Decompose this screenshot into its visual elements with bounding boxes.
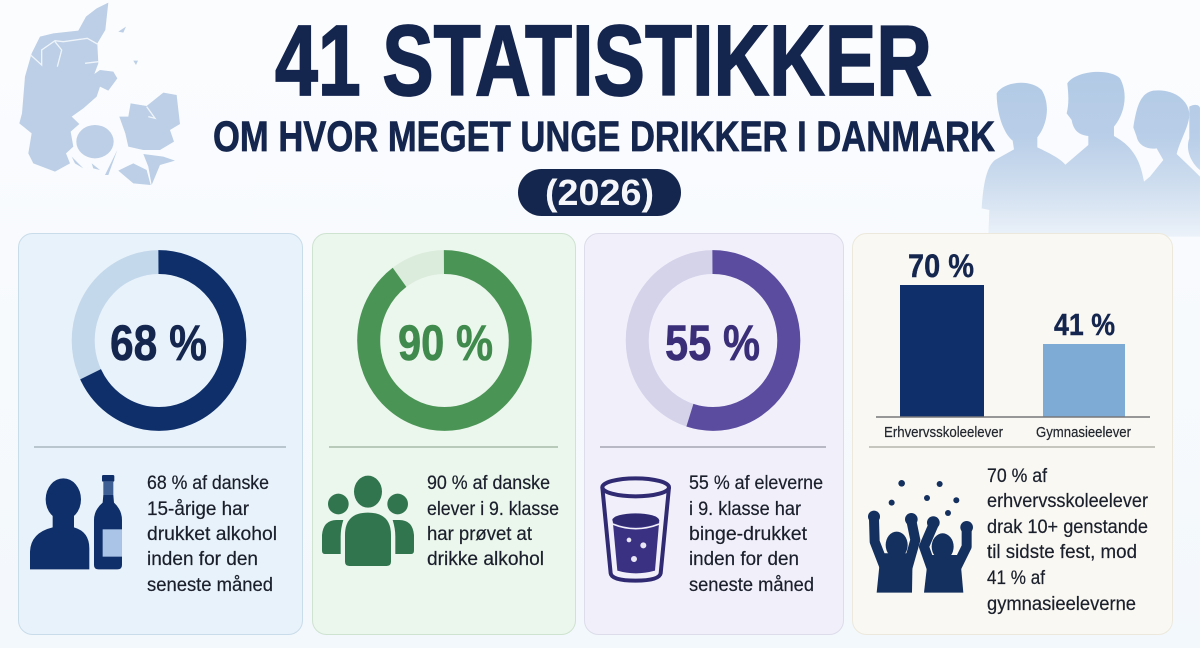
icon: cheering people — [868, 480, 973, 593]
axis label: Gymnasieelever — [1036, 424, 1131, 441]
card background — [18, 234, 302, 634]
subtitle: OM HVOR MEGET UNGE DRIKKER I DANMARK — [213, 113, 995, 161]
value 70 %: 70 % — [908, 248, 974, 284]
axis label: Erhvervsskoleelever — [884, 424, 1003, 441]
description text — [689, 473, 823, 596]
bar: Gymnasieelever — [1043, 344, 1125, 417]
card background — [852, 234, 1172, 634]
donut value: 68 % — [110, 315, 207, 371]
description text: 15-årige har — [147, 499, 250, 520]
description text: 90 % af danske — [427, 473, 550, 494]
description text: i 9. klasse har — [689, 499, 802, 520]
donut chart 90 % — [369, 262, 520, 419]
icon: group of people — [322, 476, 414, 566]
description text: 68 % af danske — [147, 473, 269, 494]
description text: 70 % af — [987, 466, 1048, 487]
description text — [987, 466, 1149, 615]
icon: person and bottle — [30, 475, 122, 569]
description text — [427, 473, 559, 570]
description text: elever i 9. klasse — [427, 499, 559, 520]
description text: binge-drukket — [689, 524, 808, 545]
description text: inden for den — [147, 549, 258, 570]
description text: seneste måned — [689, 575, 814, 596]
icon: glass — [602, 478, 669, 581]
description text: erhvervsskoleelever — [987, 491, 1149, 512]
description text: 55 % af eleverne — [689, 473, 823, 494]
description text: til sidste fest, mod — [987, 542, 1137, 563]
card background — [312, 234, 576, 634]
panel: 90 % — [312, 234, 576, 634]
description text: gymnasieeleverne — [987, 594, 1136, 615]
value 41 %: 41 % — [1054, 307, 1115, 342]
panel: 55 % — [584, 234, 844, 634]
description text: seneste måned — [147, 575, 273, 596]
year badge — [518, 169, 681, 216]
donut value: 55 % — [665, 315, 760, 371]
panel: 70 % vs 41 % — [852, 234, 1172, 634]
description text: drikke alkohol — [427, 549, 544, 570]
bar chart — [876, 248, 1150, 441]
donut chart 55 % — [637, 262, 789, 419]
description text — [147, 473, 277, 596]
donut chart 68 % — [83, 262, 235, 419]
donut value: 90 % — [398, 315, 493, 371]
card background — [584, 234, 844, 634]
map of Denmark — [19, 3, 180, 185]
title: 41 STATISTIKKER — [275, 5, 932, 117]
year badge: (2026) — [545, 172, 654, 213]
bar: Erhvervsskoleelever — [900, 285, 984, 417]
panel: 68 % — [18, 234, 302, 634]
description text: inden for den — [689, 549, 799, 570]
description text: 41 % af — [987, 568, 1046, 589]
silhouettes of young people — [982, 72, 1200, 237]
description text: drukket alkohol — [147, 524, 277, 545]
description text: drak 10+ genstande — [987, 517, 1148, 538]
description text: har prøvet at — [427, 524, 533, 545]
